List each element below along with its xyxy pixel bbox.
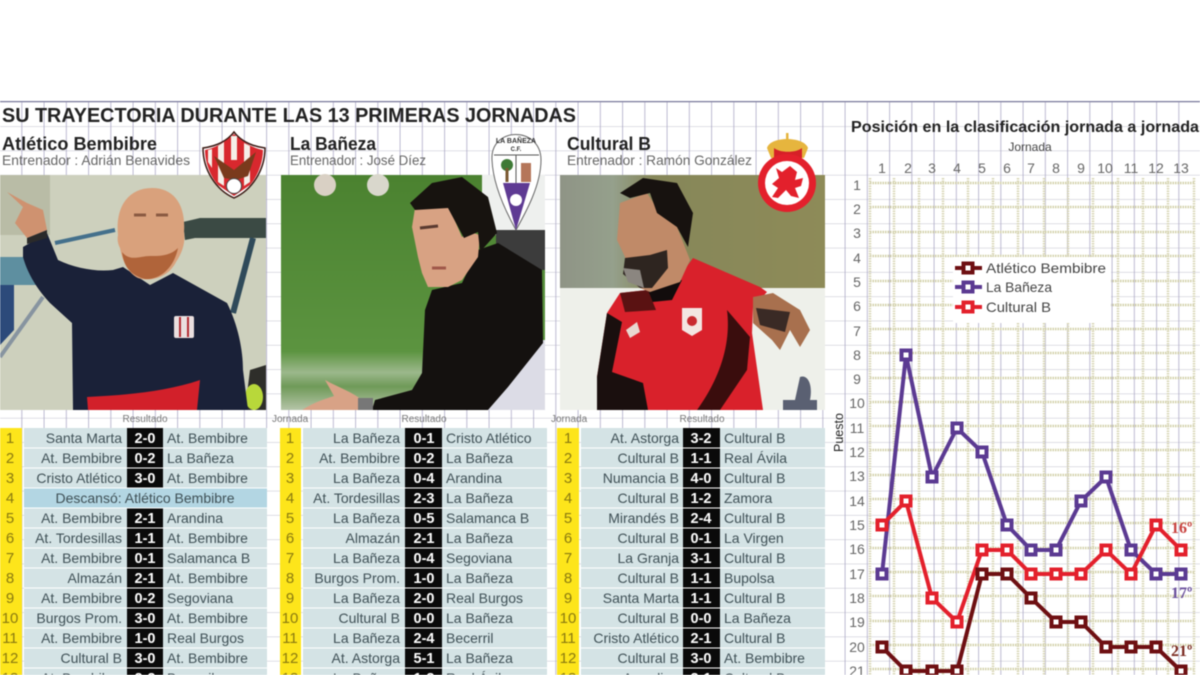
- y axis: 11: [850, 420, 864, 436]
- x axis: 7: [1027, 160, 1035, 176]
- fixtures: Cultural B: [724, 430, 785, 446]
- fixtures: 3-0: [691, 651, 711, 667]
- fixtures: La Bañeza: [333, 510, 400, 526]
- fixtures: 5: [286, 510, 294, 527]
- column headers: Jornada: [272, 414, 309, 425]
- y axis: 13: [849, 468, 865, 484]
- column headers: [551, 414, 725, 425]
- column header: Resultado: [122, 414, 168, 425]
- chart title: Posición en la clasificación jornada a jornada: [851, 119, 1199, 136]
- fixtures: At. Bembibre: [41, 590, 122, 606]
- fixtures: La Bañeza: [333, 550, 400, 566]
- fixtures: 11: [2, 630, 18, 647]
- title: SU TRAYECTORIA DURANTE LAS 13 PRIMERAS JORNADAS: [2, 105, 576, 127]
- y axis: 15: [849, 517, 865, 533]
- fixtures: 12: [282, 650, 298, 667]
- y axis: 6: [853, 298, 861, 314]
- fixtures: 0-5: [414, 511, 434, 527]
- x axis: 11: [1124, 160, 1138, 176]
- table: Cultural B: [551, 414, 825, 675]
- fixtures: 1: [564, 430, 572, 447]
- fixtures: [282, 430, 532, 675]
- fixtures: Segoviana: [167, 590, 233, 606]
- fixtures: Cultural B: [618, 650, 679, 666]
- y axis: 17: [849, 566, 865, 582]
- fixtures: 4: [564, 490, 572, 507]
- fixtures: 6: [286, 530, 294, 547]
- fixtures: 0-1: [135, 551, 155, 567]
- x axis: [878, 140, 1189, 176]
- fixtures: Santa Marta: [603, 590, 679, 606]
- fixtures: Cultural B: [61, 650, 122, 666]
- fixtures: 1-0: [414, 571, 434, 587]
- fixtures: Cristo Atlético: [36, 470, 122, 486]
- fixtures: 9: [564, 590, 572, 607]
- fixtures: La Bañeza: [333, 590, 400, 606]
- heading: Cultural B: Cultural B: [567, 134, 651, 154]
- x axis: Jornada: [1008, 140, 1052, 154]
- heading: La Bañeza: La Bañeza: [290, 134, 377, 154]
- fixtures: 2-1: [414, 531, 434, 547]
- fixtures: 2: [564, 450, 572, 467]
- fixtures: At. Bembibre: [41, 550, 122, 566]
- fixtures: Cristo Atlético: [446, 430, 532, 446]
- fixtures: 3: [564, 470, 572, 487]
- logo: Atlético Bembibre shield: [203, 132, 265, 198]
- logo: La Bañeza crest: LA BAÑEZA: [496, 136, 536, 145]
- fixtures: 5-1: [414, 651, 434, 667]
- fixtures: 1-2: [691, 491, 711, 507]
- fixtures: Salamanca B: [446, 510, 529, 526]
- x axis: 10: [1097, 160, 1113, 176]
- fixtures: Cultural B: [724, 590, 785, 606]
- column headers: Resultado: [679, 414, 725, 425]
- fixtures: Almazán: [68, 570, 122, 586]
- fixtures: 1-1: [691, 571, 711, 587]
- series: Atlético Bembibre: [882, 574, 1181, 671]
- table: Atlético Bembibre: [0, 414, 267, 675]
- fixtures: At. Bembibre: [319, 450, 400, 466]
- fixtures: 1-1: [691, 591, 711, 607]
- y axis: 20: [849, 639, 865, 655]
- x axis: 2: [904, 160, 912, 176]
- y axis: 2: [853, 201, 861, 217]
- fixtures: [560, 430, 805, 675]
- fixtures: 2-4: [414, 631, 434, 647]
- fixtures: Cultural B: [618, 530, 679, 546]
- fixtures: 3: [286, 470, 294, 487]
- fixtures: La Bañeza: [446, 490, 513, 506]
- fixtures: 2-0: [414, 591, 434, 607]
- fixtures: 12: [2, 650, 18, 667]
- logo: Cultural Leonesa crest: [758, 133, 816, 212]
- fixtures: Burgos Prom.: [314, 570, 400, 586]
- logo: La Bañeza crest: C.F.: [511, 147, 522, 153]
- fixtures: 2-3: [414, 491, 434, 507]
- fixtures: Cultural B: [724, 550, 785, 566]
- heading: Cultural B: [567, 134, 752, 168]
- y axis: 8: [853, 347, 861, 363]
- fixtures: 3-2: [691, 431, 711, 447]
- fixtures: 2: [6, 450, 14, 467]
- legend: La Bañeza: [986, 279, 1052, 295]
- fixtures: Becerril: [446, 630, 493, 646]
- y axis: 5: [853, 274, 861, 290]
- fixtures: 6: [6, 530, 14, 547]
- y axis: 10: [849, 395, 865, 411]
- x axis: 12: [1148, 160, 1164, 176]
- fixtures: 0-2: [414, 451, 434, 467]
- fixtures: Cultural B: [724, 510, 785, 526]
- end label: Cultural B 16º: 16º: [1171, 520, 1192, 537]
- fixtures: 4: [6, 490, 14, 507]
- fixtures: 3-0: [135, 611, 155, 627]
- photo: Adrián Benavides: [0, 175, 266, 410]
- fixtures: 8: [564, 570, 572, 587]
- fixtures: 0-1: [691, 531, 711, 547]
- y axis: Puesto: [832, 413, 846, 452]
- fixtures: At. Bembibre: [41, 630, 122, 646]
- fixtures: 8: [6, 570, 14, 587]
- fixtures: 0-1: [414, 431, 434, 447]
- fixtures: Cristo Atlético: [593, 630, 679, 646]
- fixtures: La Bañeza: [446, 450, 513, 466]
- fixtures: La Bañeza: [167, 450, 234, 466]
- column headers: [272, 414, 447, 425]
- y axis: [832, 177, 865, 675]
- y axis: 19: [849, 614, 865, 630]
- line chart: league position by matchday: [832, 119, 1199, 675]
- column headers: Jornada: [551, 414, 588, 425]
- fixtures: Real Ávila: [724, 450, 787, 466]
- fixtures: La Bañeza: [446, 610, 513, 626]
- x axis: 5: [978, 160, 986, 176]
- fixtures: Burgos Prom.: [36, 610, 122, 626]
- fixtures: 10: [282, 610, 298, 627]
- fixtures: 5: [6, 510, 14, 527]
- fixtures: 2-1: [691, 631, 711, 647]
- fixtures: 9: [286, 590, 294, 607]
- table: La Bañeza: [272, 414, 547, 675]
- y axis: 1: [853, 177, 861, 193]
- fixtures: At. Bembibre: [167, 610, 248, 626]
- fixtures: La Virgen: [724, 530, 784, 546]
- fixtures: 7: [564, 550, 572, 567]
- end label: Atlético Bembibre 21º: 21º: [1171, 643, 1192, 660]
- fixtures: 10: [2, 610, 18, 627]
- y axis: 3: [853, 225, 861, 241]
- fixtures: 10: [560, 610, 576, 627]
- fixtures: 0-0: [691, 611, 711, 627]
- fixtures: 2: [286, 450, 294, 467]
- x axis: 9: [1077, 160, 1085, 176]
- fixtures: At. Tordesillas: [35, 530, 122, 546]
- fixtures: At. Bembibre: [167, 430, 248, 446]
- legend: Atlético Bembibre: [986, 260, 1106, 276]
- fixtures: 7: [286, 550, 294, 567]
- fixtures: Cultural B: [724, 630, 785, 646]
- column headers: Resultado: [401, 414, 447, 425]
- fixtures: Mirandés B: [608, 510, 679, 526]
- fixtures: Segoviana: [446, 550, 512, 566]
- heading: Atlético Bembibre: [2, 134, 190, 168]
- fixtures: 3: [6, 470, 14, 487]
- fixtures: 1: [6, 430, 14, 447]
- fixtures: 0-4: [414, 551, 434, 567]
- fixtures: At. Bembibre: [167, 570, 248, 586]
- fixtures: Cultural B: [339, 610, 400, 626]
- fixtures: 2-0: [135, 431, 155, 447]
- fixtures: 0-0: [414, 611, 434, 627]
- fixtures: La Bañeza: [446, 530, 513, 546]
- x axis: 13: [1173, 160, 1189, 176]
- fixtures: 2-4: [691, 511, 711, 527]
- fixtures: Bupolsa: [724, 570, 775, 586]
- fixtures: 1: [286, 430, 294, 447]
- y axis: 12: [849, 444, 865, 460]
- fixtures: Salamanca B: [167, 550, 250, 566]
- heading: Cultural B: Entrenador : Ramón González: [567, 152, 752, 168]
- fixtures: 4: [286, 490, 294, 507]
- fixtures: La Bañeza: [446, 570, 513, 586]
- fixtures: At. Bembibre: [167, 530, 248, 546]
- x axis: 6: [1003, 160, 1011, 176]
- fixtures: At. Tordesillas: [313, 490, 400, 506]
- y axis: 14: [849, 493, 865, 509]
- fixtures: 0-2: [135, 591, 155, 607]
- x axis: 3: [928, 160, 936, 176]
- fixtures: 8: [286, 570, 294, 587]
- fixtures: 3-0: [135, 651, 155, 667]
- heading: La Bañeza: Entrenador : José Díez: [290, 152, 426, 168]
- fixtures: La Granja: [618, 550, 679, 566]
- fixtures: 12: [560, 650, 576, 667]
- fixtures: 0-2: [135, 451, 155, 467]
- fixtures: La Bañeza: [724, 610, 791, 626]
- fixtures: Cultural B: [618, 610, 679, 626]
- x axis: 8: [1052, 160, 1060, 176]
- fixtures: 1-0: [135, 631, 155, 647]
- fixtures: [2, 430, 250, 675]
- legend: [953, 257, 1111, 323]
- fixtures: 0-4: [414, 471, 434, 487]
- legend: Cultural B: [986, 299, 1051, 315]
- fixtures: Santa Marta: [46, 430, 122, 446]
- fixtures: Zamora: [724, 490, 772, 506]
- fixtures: Cultural B: [618, 490, 679, 506]
- fixtures: Numancia B: [603, 470, 679, 486]
- fixtures: 3-0: [135, 471, 155, 487]
- end label: La Bañeza 17º: 17º: [1171, 585, 1192, 602]
- fixtures: At. Bembibre: [724, 650, 805, 666]
- fixtures: At. Bembibre: [41, 510, 122, 526]
- y axis: 18: [849, 590, 865, 606]
- fixtures: 2-1: [135, 511, 155, 527]
- y axis: 9: [853, 371, 861, 387]
- fixtures: 9: [6, 590, 14, 607]
- fixtures: La Bañeza: [333, 470, 400, 486]
- fixtures: 11: [282, 630, 298, 647]
- fixtures: Real Burgos: [446, 590, 523, 606]
- fixtures: Cultural B: [618, 450, 679, 466]
- fixtures: 2-1: [135, 571, 155, 587]
- fixtures: At. Bembibre: [167, 650, 248, 666]
- fixtures: 4-0: [691, 471, 711, 487]
- fixtures: Cultural B: [618, 570, 679, 586]
- fixtures: La Bañeza: [333, 630, 400, 646]
- y axis: 16: [849, 541, 865, 557]
- fixtures: At. Astorga: [611, 430, 679, 446]
- fixtures: 11: [560, 630, 576, 647]
- fixtures: At. Bembibre: [41, 450, 122, 466]
- fixtures: Arandina: [167, 510, 223, 526]
- x axis: 4: [953, 160, 961, 176]
- fixtures: 7: [6, 550, 14, 567]
- fixtures: At. Bembibre: [167, 470, 248, 486]
- series: Cultural B: [882, 501, 1181, 622]
- fixtures: 1-1: [691, 451, 711, 467]
- fixtures: La Bañeza: [333, 430, 400, 446]
- heading: Atlético Bembibre: Entrenador : Adrián Benavides: [2, 152, 190, 168]
- fixtures: Descansó: Atlético Bembibre: [56, 490, 235, 506]
- photo: José Díez: [281, 174, 545, 410]
- fixtures: Cultural B: [724, 470, 785, 486]
- x axis: 1: [878, 160, 886, 176]
- fixtures: 5: [564, 510, 572, 527]
- y axis: 4: [853, 250, 861, 266]
- photo: Ramón González: [560, 175, 825, 410]
- fixtures: Real Burgos: [167, 630, 244, 646]
- y axis: 7: [853, 323, 861, 339]
- fixtures: At. Astorga: [332, 650, 400, 666]
- fixtures: Arandina: [446, 470, 502, 486]
- fixtures: 6: [564, 530, 572, 547]
- fixtures: 3-1: [691, 551, 711, 567]
- logo: La Bañeza crest: [492, 134, 541, 230]
- fixtures: Almazán: [346, 530, 400, 546]
- fixtures: 1-1: [135, 531, 155, 547]
- series: La Bañeza: [882, 355, 1181, 574]
- heading: Atlético Bembibre: Atlético Bembibre: [2, 134, 157, 154]
- heading: La Bañeza: [290, 134, 426, 168]
- fixtures: La Bañeza: [446, 650, 513, 666]
